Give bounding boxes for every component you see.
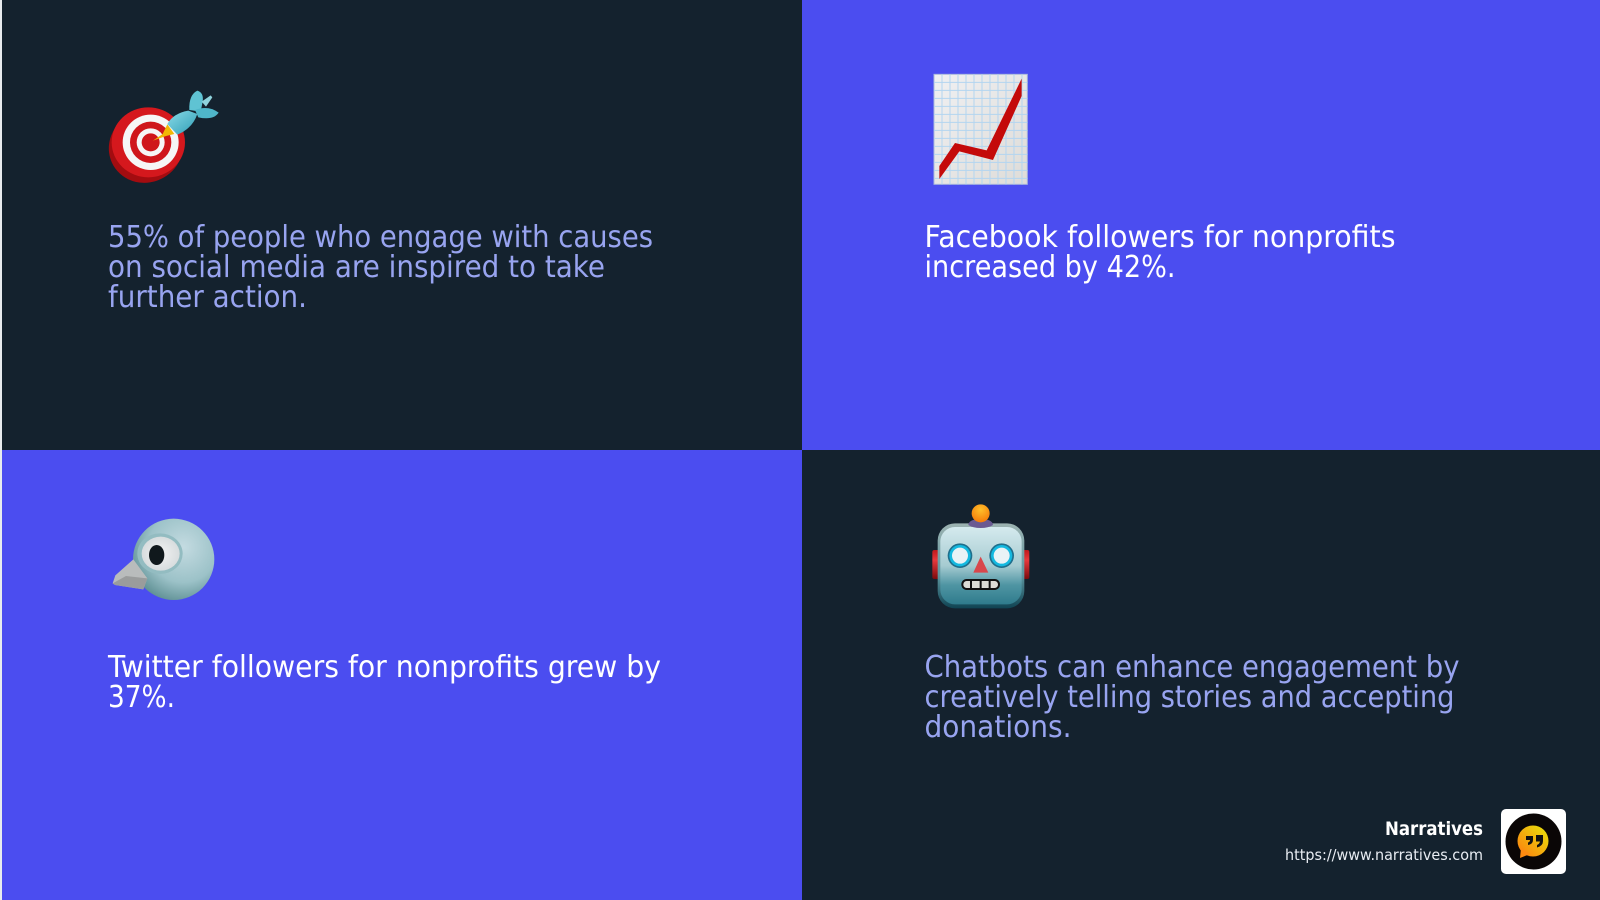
text: causes stat: on social media are inspired to take — [108, 250, 605, 285]
text: Chatbots stat: donations. — [924, 710, 1072, 745]
panel: Facebook stat — [802, 0, 1600, 450]
icon: robot — [932, 504, 1029, 608]
text: causes stat — [108, 220, 653, 315]
panel: causes stat — [2, 0, 802, 450]
text: Twitter stat: 37%. — [108, 680, 175, 715]
text: causes stat: 55% of people who engage with causes — [108, 220, 653, 255]
icon: dart and target — [96, 91, 219, 196]
text: Facebook stat — [924, 220, 1396, 285]
text: Twitter stat: Twitter followers for nonprofits grew by — [107, 650, 661, 685]
text: causes stat: further action. — [108, 280, 307, 315]
icon: bird — [113, 519, 214, 600]
text: Twitter stat — [107, 650, 661, 715]
panel: Twitter stat — [2, 450, 802, 900]
left edge strip — [0, 0, 2, 900]
text: Chatbots stat — [924, 650, 1460, 745]
brand name: Narratives — [1385, 818, 1483, 840]
text: Facebook stat: Facebook followers for nonprofits — [924, 220, 1396, 255]
brand URL: https://www.narratives.com — [1285, 846, 1483, 864]
text: Chatbots stat: Chatbots can enhance engagement by — [924, 650, 1460, 685]
icon: chart increasing — [934, 74, 1027, 184]
text: Chatbots stat: creatively telling stories and accepting — [924, 680, 1454, 715]
text: Facebook stat: increased by 42%. — [924, 250, 1176, 285]
logo — [1501, 809, 1566, 874]
panel: Chatbots stat — [802, 450, 1600, 900]
